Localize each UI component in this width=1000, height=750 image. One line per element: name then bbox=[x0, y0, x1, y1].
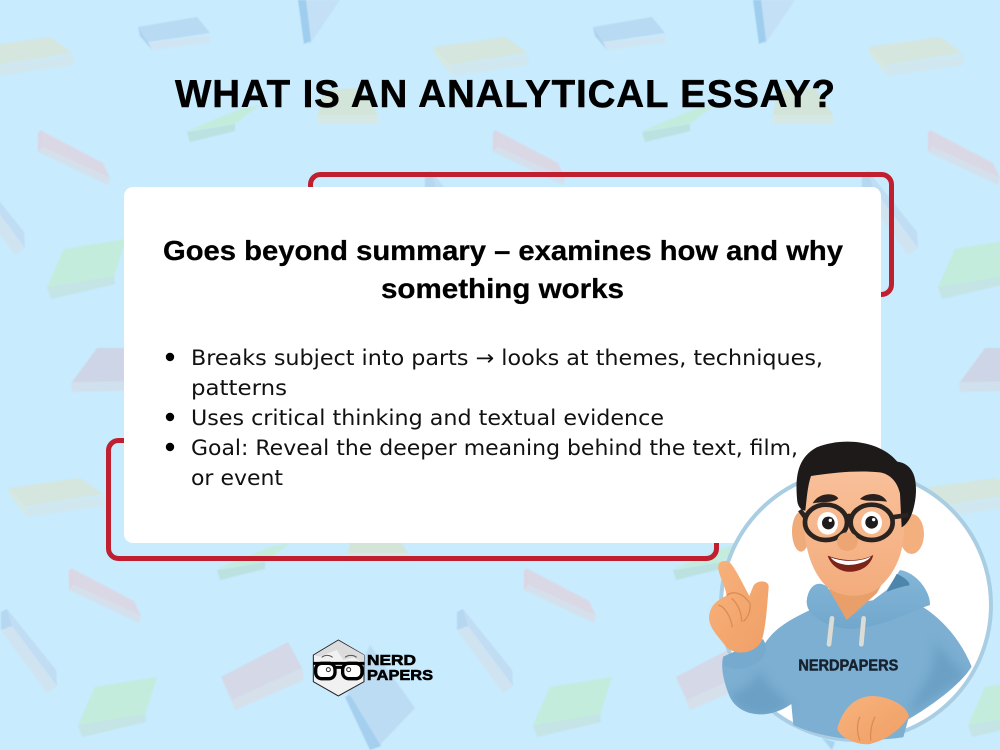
heading bbox=[163, 235, 843, 304]
heading: Goes beyond summary – examines how and why bbox=[163, 235, 843, 266]
heading: something works bbox=[381, 273, 624, 304]
resting hand creases bbox=[857, 717, 875, 741]
drawstrings bbox=[829, 618, 864, 644]
glasses bbox=[800, 505, 908, 540]
hoodie text: NERDPAPERS bbox=[798, 658, 898, 675]
raised hand bbox=[709, 561, 769, 653]
white circle behind character bbox=[721, 470, 991, 740]
bullet list: Breaks subject into parts → looks at themes, techniques, bbox=[191, 346, 823, 370]
face bbox=[803, 469, 904, 596]
nose bbox=[837, 532, 858, 551]
title: WHAT IS AN ANALYTICAL ESSAY? bbox=[175, 73, 835, 116]
red frame: top right bbox=[310, 174, 892, 294]
bullet list: patterns bbox=[191, 376, 287, 400]
hood bbox=[807, 570, 930, 629]
eyebrows bbox=[813, 494, 838, 503]
resting hand bbox=[837, 696, 909, 744]
neck bbox=[827, 570, 890, 620]
hood inner shadow bbox=[887, 574, 909, 592]
logo: Nerd Papers: PAPERS bbox=[367, 667, 433, 684]
logo: Nerd Papers bbox=[313, 640, 433, 696]
red frame: bottom left bbox=[108, 440, 716, 558]
bullet list: or event bbox=[191, 466, 283, 490]
bullet list: Uses critical thinking and textual evidence bbox=[191, 406, 664, 430]
sleeve cuff bbox=[723, 639, 766, 669]
character: cartoon man in blue hoodie pointing up bbox=[709, 442, 972, 744]
hoodie body bbox=[722, 597, 972, 740]
ears bbox=[792, 512, 810, 552]
bullet list: Goal: Reveal the deeper meaning behind the text, film, bbox=[191, 436, 798, 460]
finger creases bbox=[718, 593, 750, 627]
hair bbox=[797, 442, 916, 527]
logo: Nerd Papers: NERD bbox=[367, 652, 416, 669]
panel: white content card bbox=[124, 187, 881, 543]
bullet list bbox=[166, 346, 823, 490]
hoodie soft shading bbox=[732, 650, 966, 714]
mouth bbox=[828, 555, 873, 572]
eyes bbox=[817, 512, 838, 535]
